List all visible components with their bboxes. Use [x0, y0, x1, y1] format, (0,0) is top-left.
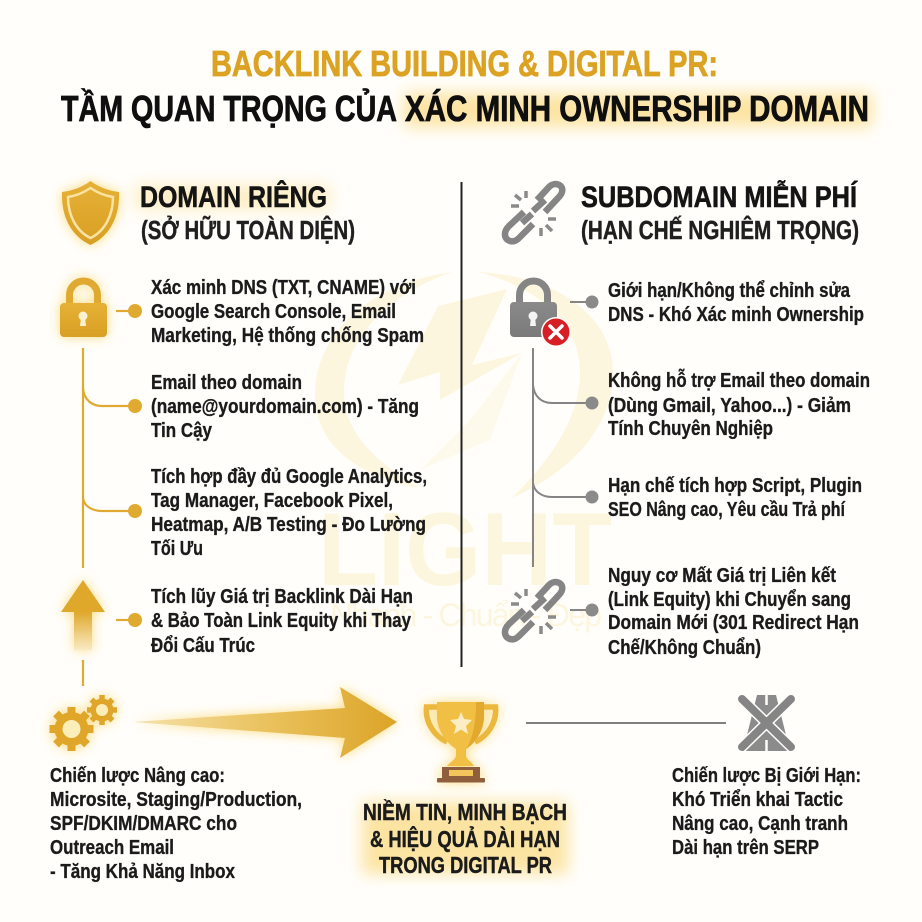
heading glow — [135, 185, 330, 209]
icon: gold lock — [60, 281, 107, 337]
text: no domain email: Không hỗ trợ Email theo domain — [608, 368, 870, 392]
icon: broken link — [505, 184, 562, 241]
heading: (HẠN CHẾ NGHIÊM TRỌNG) — [581, 215, 859, 245]
heading: DOMAIN RIÊNG — [140, 180, 327, 214]
text: backlink value: & Bảo Toàn Link Equity khi Thay — [151, 610, 412, 632]
timeline connectors — [533, 302, 587, 610]
text: analytics integration: Tag Manager, Facebook Pixel, — [151, 490, 393, 512]
text: no domain email: (Dùng Gmail, Yahoo...) - Giảm — [608, 395, 851, 417]
text: analytics integration: Tối Ưu — [151, 538, 203, 560]
text: backlink value — [151, 586, 413, 657]
icon: gears — [50, 695, 117, 751]
callout text: NIỀM TIN, MINH BẠCH — [363, 798, 567, 825]
heading: (SỞ HỮU TOÀN DIỆN) — [141, 214, 355, 245]
text: dns limits: DNS - Khó Xác minh Ownership — [608, 304, 864, 326]
text: link equity risk: Domain Mới (301 Redirect Hạn — [608, 612, 859, 634]
text: script limits: SEO Nâng cao, Yêu cầu Trả phí — [608, 499, 846, 521]
panel: subdomain miễn phí — [505, 180, 870, 659]
title line 1: BACKLINK BUILDING & DIGITAL PR: — [211, 43, 718, 84]
bullet dots — [128, 304, 142, 627]
text: dns verification: Xác minh DNS (TXT, CNAME) với — [151, 277, 416, 299]
text: email by domain: Email theo domain — [151, 372, 302, 394]
text: limited strategy: Nâng cao, Cạnh tranh — [672, 813, 848, 835]
text: advanced strategy: Microsite, Staging/Production, — [50, 789, 302, 811]
callout text — [363, 798, 567, 878]
callout glow — [362, 802, 568, 874]
icon: broken link lower — [505, 582, 562, 639]
text: dns limits: Giới hạn/Không thể chỉnh sửa — [608, 280, 851, 302]
text: link equity risk — [608, 565, 859, 659]
text: script limits — [608, 475, 862, 521]
title — [61, 43, 872, 129]
icon: gray lock with x — [510, 281, 571, 347]
text: limited strategy: Khó Triển khai Tactic — [672, 789, 843, 811]
connector line — [526, 722, 726, 724]
heading — [140, 180, 355, 245]
watermark logo: Nhanh - Chuẩn - Đẹp — [330, 597, 602, 633]
timeline connectors — [83, 311, 130, 686]
title line 2: TẦM QUAN TRỌNG CỦA — [61, 87, 397, 129]
heading — [581, 180, 859, 245]
big arrow — [133, 687, 397, 758]
text: advanced strategy: - Tăng Khả Năng Inbox — [50, 861, 235, 883]
text: dns verification: Marketing, Hệ thống chống Spam — [151, 325, 424, 347]
title highlight glow — [404, 93, 872, 127]
callout: trust outcome — [362, 798, 568, 878]
text: script limits: Hạn chế tích hợp Script, Plugin — [608, 475, 862, 497]
text: advanced strategy: SPF/DKIM/DMARC cho — [50, 813, 237, 835]
icon: shield — [62, 181, 119, 245]
text: limited strategy: Chiến lược Bị Giới Hạn: — [672, 765, 861, 787]
text: link equity risk: (Link Equity) khi Chuyển sang — [608, 589, 851, 611]
text: limited strategy — [672, 765, 861, 859]
text: email by domain — [151, 372, 419, 442]
text: link equity risk: Nguy cơ Mất Giá trị Liên kết — [608, 565, 836, 587]
center divider — [460, 182, 462, 667]
text: advanced strategy: Outreach Email — [50, 837, 174, 859]
text: limited strategy: Dài hạn trên SERP — [672, 837, 819, 859]
heading: SUBDOMAIN MIỄN PHÍ — [581, 180, 858, 214]
bullet dots — [586, 296, 598, 616]
text: analytics integration: Heatmap, A/B Testing - Đo Lường — [151, 514, 426, 536]
text: analytics integration: Tích hợp đầy đủ Google Analytics, — [151, 466, 427, 488]
text: email by domain: Tin Cậy — [151, 420, 213, 442]
text: dns verification: Google Search Console, Email — [151, 301, 396, 323]
text: link equity risk: Chế/Không Chuẩn) — [608, 637, 761, 659]
icon: trophy — [426, 702, 496, 782]
text: advanced strategy: Chiến lược Nâng cao: — [50, 765, 225, 787]
text: advanced strategy — [50, 765, 302, 883]
text: email by domain: (name@yourdomain.com) - Tăng — [151, 396, 419, 418]
text: backlink value: Đổi Cấu Trúc — [151, 635, 255, 657]
icon: crossed road — [741, 695, 792, 751]
text: analytics integration — [151, 466, 427, 560]
text: dns verification — [151, 277, 424, 347]
callout text: TRONG DIGITAL PR — [379, 852, 552, 878]
watermark logo — [315, 272, 613, 633]
callout text: & HIỆU QUẢ DÀI HẠN — [370, 824, 560, 852]
text: no domain email: Tính Chuyên Nghiệp — [608, 418, 773, 440]
icon: up arrow — [61, 580, 105, 650]
panel: bottom outcome — [50, 687, 861, 883]
text: dns limits — [608, 280, 864, 326]
watermark logo: LIGHT — [318, 492, 612, 608]
text: backlink value: Tích lũy Giá trị Backlink Dài Hạn — [151, 586, 413, 608]
text: no domain email — [608, 368, 870, 440]
panel: domain riêng — [60, 180, 427, 686]
